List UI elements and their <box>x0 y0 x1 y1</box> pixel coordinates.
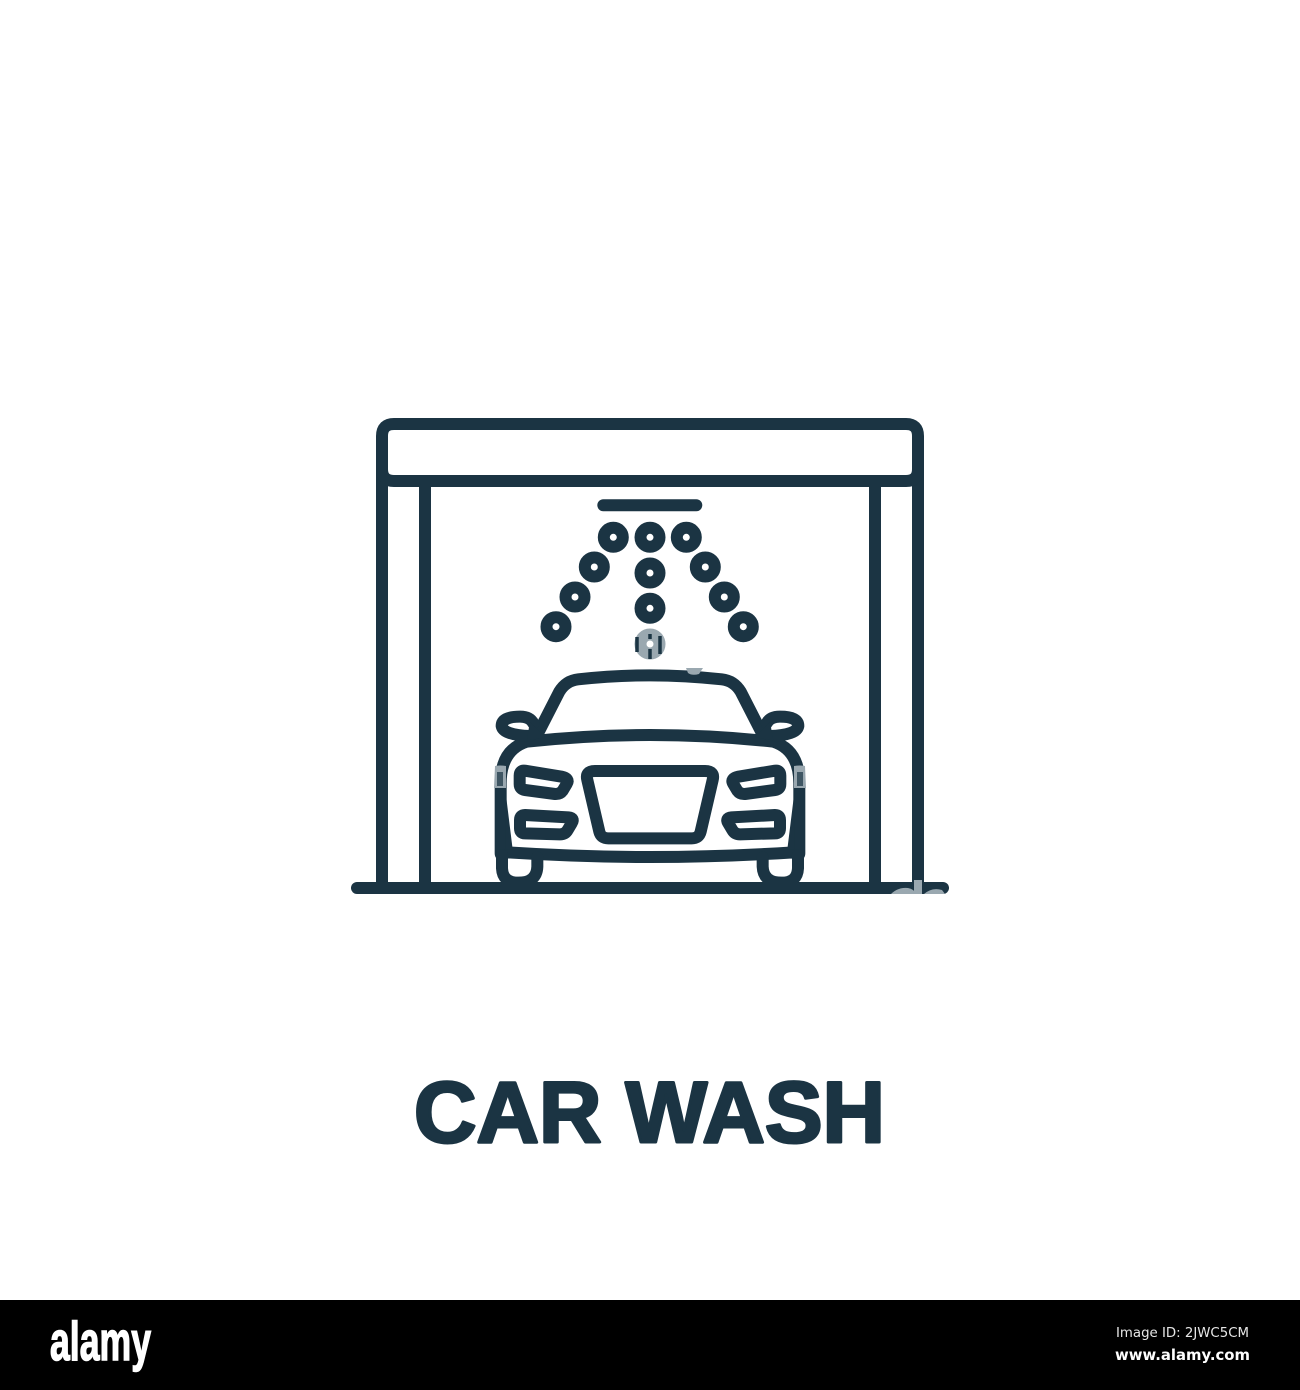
icon: car <box>501 675 799 883</box>
left lights <box>520 771 573 834</box>
icon: ground line <box>357 882 943 894</box>
grille <box>587 771 713 838</box>
footer logo: alamy <box>50 1310 151 1372</box>
body side tapers <box>505 790 795 849</box>
footer bar <box>0 1300 1300 1390</box>
left wheel <box>502 855 537 883</box>
watermark traces <box>494 668 945 894</box>
site address: www.alamy.com <box>1115 1346 1250 1364</box>
right mirror <box>767 717 798 736</box>
title: car wash: CAR WASH <box>414 1065 885 1161</box>
icon: watermarked lower drop <box>637 634 660 659</box>
right lights <box>727 771 780 834</box>
right wheel <box>763 855 798 883</box>
pillar joints <box>527 722 773 741</box>
image id: Image ID: 2JWC5CM <box>1116 1325 1249 1341</box>
car roof and windshield <box>538 675 762 733</box>
icon: car wash <box>357 424 945 894</box>
left mirror <box>502 717 533 736</box>
icon: gantry frame <box>382 424 918 888</box>
car body <box>501 735 799 857</box>
icon: spray bar <box>603 499 696 511</box>
icon: water drops <box>546 528 753 636</box>
